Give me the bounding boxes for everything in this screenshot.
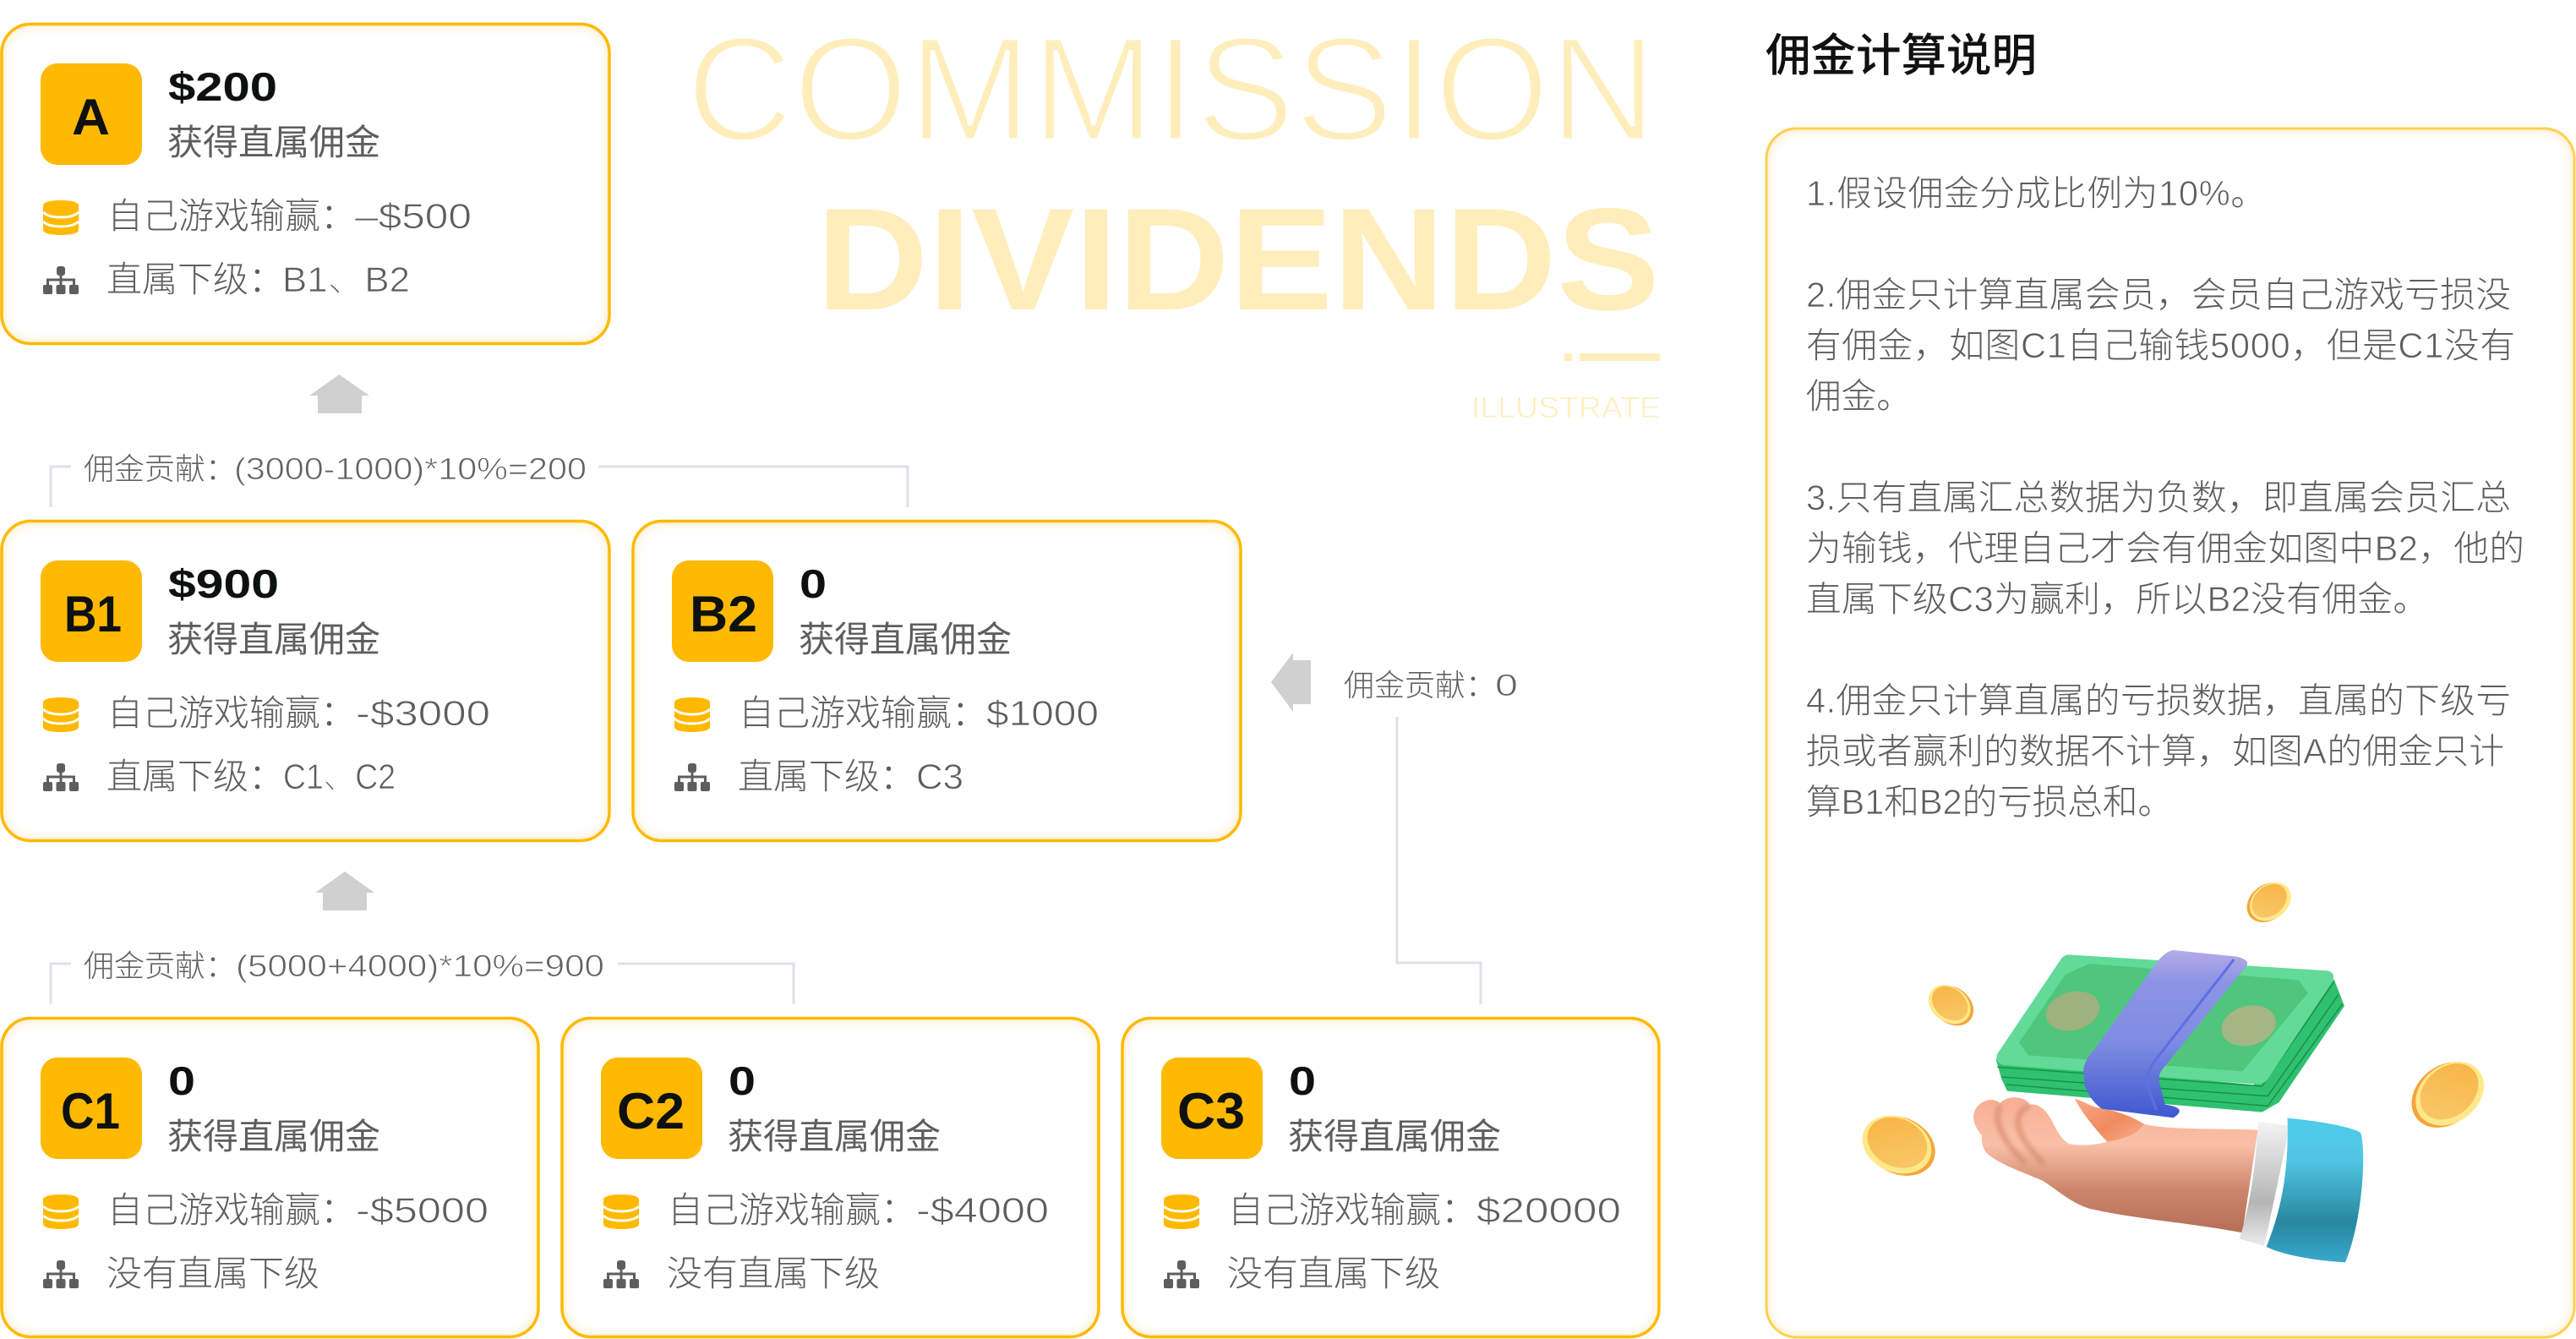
badge B1: B1 <box>64 586 122 642</box>
game win/loss <box>668 1190 1049 1230</box>
coin: lower left <box>1851 1108 1947 1183</box>
icon: hierarchy <box>1164 1260 1199 1288</box>
panel: card C1 <box>2 1018 538 1337</box>
direct subordinates <box>106 757 396 796</box>
text block: rule 2: 有佣金，如图C1自己输钱5000，但是C1没有 <box>1806 325 2515 365</box>
arrow: C to B1 <box>315 872 374 910</box>
text block: rule 2: 佣金。 <box>1806 376 1912 416</box>
arrow: B to A <box>309 374 369 413</box>
direct subordinates: 没有直属下级 <box>106 1254 319 1293</box>
badge A <box>41 63 142 165</box>
icon: hierarchy <box>603 1260 639 1288</box>
icon: coins <box>43 697 79 732</box>
panel: card C2 <box>562 1018 1099 1337</box>
hand <box>1973 1097 2258 1232</box>
game win/loss: –$500 <box>355 196 472 236</box>
direct subordinates: 直属下级： <box>106 757 284 796</box>
commission label: 获得直属佣金 <box>167 123 380 162</box>
text block: rule 4 <box>1806 680 2511 822</box>
game win/loss <box>1228 1190 1621 1230</box>
direct subordinates: 没有直属下级 <box>667 1254 880 1293</box>
panel: card C3 <box>1122 1018 1659 1337</box>
badge A: A <box>72 89 110 145</box>
commission amount: 0 <box>1289 1058 1316 1103</box>
badge C1 <box>41 1058 142 1159</box>
text block: rule 1: 1.假设佣金分成比例为10%。 <box>1806 173 2266 213</box>
commission label: 获得直属佣金 <box>167 620 380 659</box>
badge C2: C2 <box>617 1083 685 1140</box>
game win/loss: $20000 <box>1476 1190 1621 1230</box>
direct subordinates: 没有直属下级 <box>1227 1254 1440 1293</box>
shirt cuff <box>2240 1122 2289 1246</box>
connector label: C3 contribution: 0 <box>1495 668 1518 702</box>
icon: coins <box>603 1194 639 1229</box>
connector label: B1 contribution <box>51 451 908 507</box>
text block: rule 3: 3.只有直属汇总数据为负数，即直属会员汇总 <box>1806 478 2511 517</box>
text block: rule 3: 直属下级C3为赢利，所以B2没有佣金。 <box>1806 579 2428 619</box>
text block: rule 2: 2.佣金只计算直属会员，会员自己游戏亏损没 <box>1806 275 2511 314</box>
game win/loss: $1000 <box>986 693 1099 733</box>
text block: rule 3: 为输钱，代理自己才会有佣金如图中B2，他的 <box>1806 528 2524 568</box>
game win/loss <box>739 693 1099 733</box>
game win/loss <box>107 196 472 236</box>
direct subordinates: C3 <box>916 757 963 796</box>
icon: coins <box>43 200 79 235</box>
icon: hierarchy <box>43 1260 79 1288</box>
icon: coins <box>43 1194 79 1229</box>
game win/loss: -$3000 <box>356 693 490 733</box>
game win/loss: -$4000 <box>916 1190 1049 1230</box>
panel: card B2 <box>633 521 1241 840</box>
connector label: B1 contribution: (3000-1000)*10%=200 <box>234 451 587 486</box>
badge C3 <box>1161 1058 1263 1159</box>
game win/loss <box>107 693 490 733</box>
badge C3: C3 <box>1177 1083 1245 1140</box>
direct subordinates: C1、C2 <box>283 757 396 796</box>
game win/loss: 自己游戏输赢： <box>668 1190 916 1230</box>
game win/loss <box>107 1190 488 1230</box>
commission label: 获得直属佣金 <box>728 1117 941 1156</box>
icon: hierarchy <box>43 763 79 791</box>
game win/loss: 自己游戏输赢： <box>1228 1190 1476 1230</box>
badge B2 <box>672 560 773 662</box>
heading: explanation: 佣金计算说明 <box>1766 31 2037 81</box>
direct subordinates: 直属下级： <box>738 757 915 796</box>
connector label: C3 contribution: 佣金贡献： <box>1344 668 1496 702</box>
connector label: B1 contribution: 佣金贡献： <box>84 451 236 486</box>
text block: rule 2 <box>1806 275 2515 416</box>
connector label: B1 sources <box>51 948 794 1004</box>
commission amount: 0 <box>800 561 827 606</box>
hand thumb <box>2075 1099 2144 1142</box>
text block: rule 4: 4.佣金只计算直属的亏损数据，直属的下级亏 <box>1806 680 2511 720</box>
commission amount: 0 <box>729 1058 756 1103</box>
text block: rule 4: 算B1和B2的亏损总和。 <box>1806 782 2173 822</box>
icon: coins <box>1164 1194 1199 1229</box>
arrow: C3 to B2 <box>1271 653 1311 712</box>
title line: COMMISSION: COMMISSION <box>686 7 1656 172</box>
icon: hierarchy <box>43 266 79 294</box>
icon: coins <box>674 697 710 732</box>
panel: explanation <box>1766 128 2574 1337</box>
text block: rule 4: 损或者赢利的数据不计算，如图A的佣金只计 <box>1806 731 2504 771</box>
commission amount: $900 <box>168 561 279 606</box>
game win/loss: 自己游戏输赢： <box>107 1190 356 1230</box>
commission amount: 0 <box>168 1058 195 1103</box>
title line: DIVIDENDS: DIVIDENDS <box>816 178 1660 341</box>
coin: top <box>2240 878 2298 926</box>
title: COMMISSION DIVIDENDS ILLUSTRATE <box>686 7 1661 424</box>
subtitle: ILLUSTRATE: ILLUSTRATE <box>1471 391 1661 424</box>
badge C1: C1 <box>61 1083 120 1140</box>
sleeve cuff <box>2267 1118 2363 1262</box>
text block: rule 3 <box>1806 478 2524 619</box>
game win/loss: 自己游戏输赢： <box>107 693 356 733</box>
icon: hierarchy <box>674 763 710 791</box>
money stack <box>1996 950 2344 1118</box>
coin: left <box>1921 981 1981 1030</box>
connector label: C3 contribution <box>1344 668 1518 1004</box>
game win/loss: -$5000 <box>356 1190 488 1230</box>
commission label: 获得直属佣金 <box>1288 1117 1501 1156</box>
game win/loss: 自己游戏输赢： <box>739 693 987 733</box>
direct subordinates <box>106 260 410 299</box>
game win/loss: 自己游戏输赢： <box>107 196 356 236</box>
badge B1 <box>41 560 142 662</box>
connector label: B1 sources: (5000+4000)*10%=900 <box>236 948 604 983</box>
commission label: 获得直属佣金 <box>799 620 1012 659</box>
direct subordinates: 直属下级： <box>106 260 284 299</box>
direct subordinates: B1、B2 <box>282 260 410 299</box>
commission amount: $200 <box>168 64 277 109</box>
connector label: B1 sources: 佣金贡献： <box>84 948 236 983</box>
commission label: 获得直属佣金 <box>167 1117 380 1156</box>
panel: card A <box>2 24 609 343</box>
badge B2: B2 <box>690 586 757 642</box>
badge C2 <box>601 1058 702 1159</box>
decorative dash <box>1564 353 1660 361</box>
illustration: coins <box>1851 878 2496 1183</box>
illustration: hand holding money <box>1973 950 2363 1262</box>
coin: right <box>2400 1055 2496 1134</box>
panel: card B1 <box>2 521 609 840</box>
